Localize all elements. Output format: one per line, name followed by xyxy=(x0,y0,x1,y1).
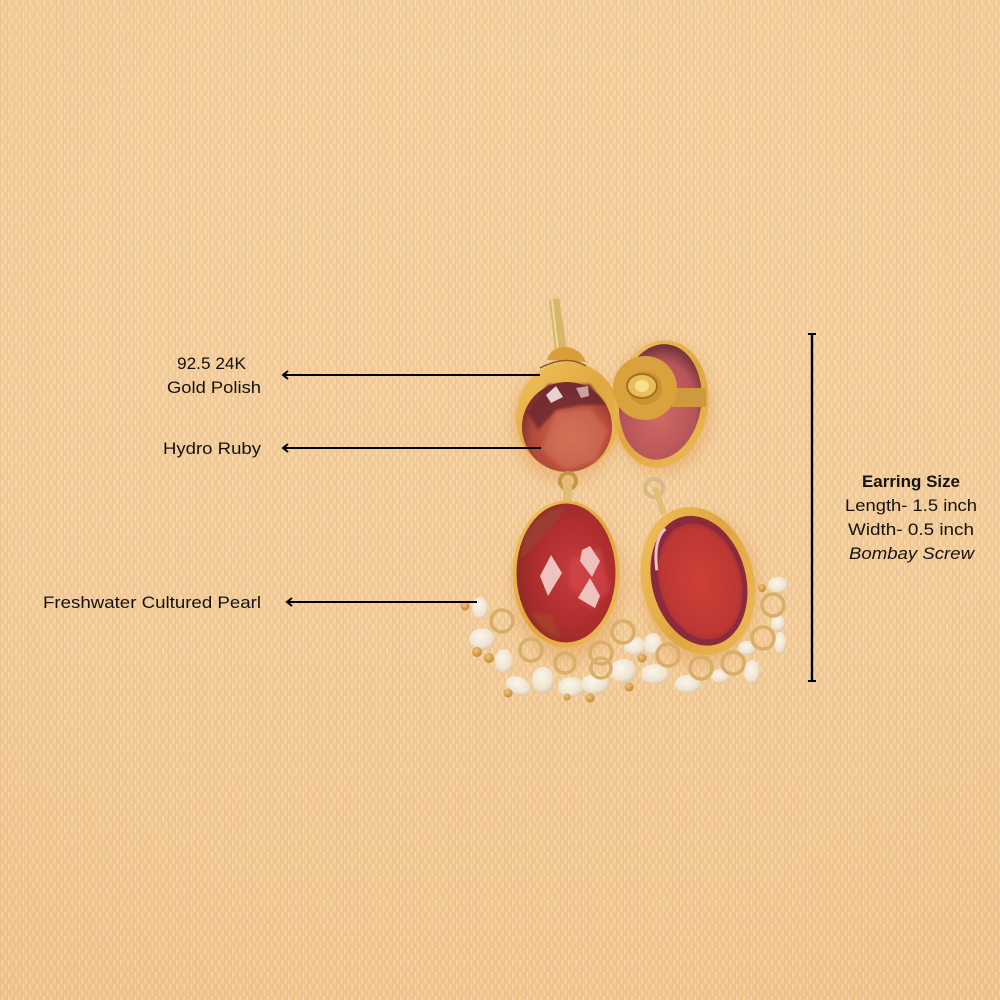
pearl tassel rings xyxy=(491,610,634,678)
label: freshwater cultured pearl: Freshwater Cultured Pearl xyxy=(43,594,261,612)
text block: earring size: Earring Size xyxy=(862,473,960,491)
arrow: to freshwater pearl xyxy=(287,598,477,606)
icon: back screw disc xyxy=(613,356,677,420)
text block: earring size: Bombay Screw xyxy=(849,545,975,563)
left earring xyxy=(491,298,634,678)
top hydro ruby stone xyxy=(522,382,612,472)
arrow: to hydro ruby xyxy=(283,444,541,452)
label: gold polish: Gold Polish xyxy=(167,379,261,397)
text block: earring size: Width- 0.5 inch xyxy=(848,521,974,539)
label: gold polish: 92.5 24K xyxy=(177,355,246,373)
label: hydro ruby: Hydro Ruby xyxy=(163,440,262,458)
arrow: to gold polish xyxy=(283,371,540,379)
connector loop xyxy=(560,473,576,504)
oval hydro ruby stone xyxy=(516,504,616,642)
icon: bombay screw post xyxy=(547,298,586,362)
text block: earring size xyxy=(845,473,977,563)
connector loop xyxy=(645,479,663,512)
top stone setting xyxy=(516,360,620,472)
top stone setting, back view xyxy=(606,334,716,474)
dimension line: earring length xyxy=(808,334,816,681)
freshwater pearls and gold beads xyxy=(460,577,788,702)
oval drop setting xyxy=(624,494,772,668)
label: gold polish xyxy=(167,355,261,397)
right earring xyxy=(606,334,784,679)
oval hydro ruby back stone xyxy=(636,505,761,657)
bar on the back xyxy=(672,388,706,407)
oval drop setting xyxy=(512,500,620,648)
text block: earring size: Length- 1.5 inch xyxy=(845,497,977,515)
pearl tassel rings xyxy=(657,594,784,679)
shadow under the earrings xyxy=(512,342,758,666)
